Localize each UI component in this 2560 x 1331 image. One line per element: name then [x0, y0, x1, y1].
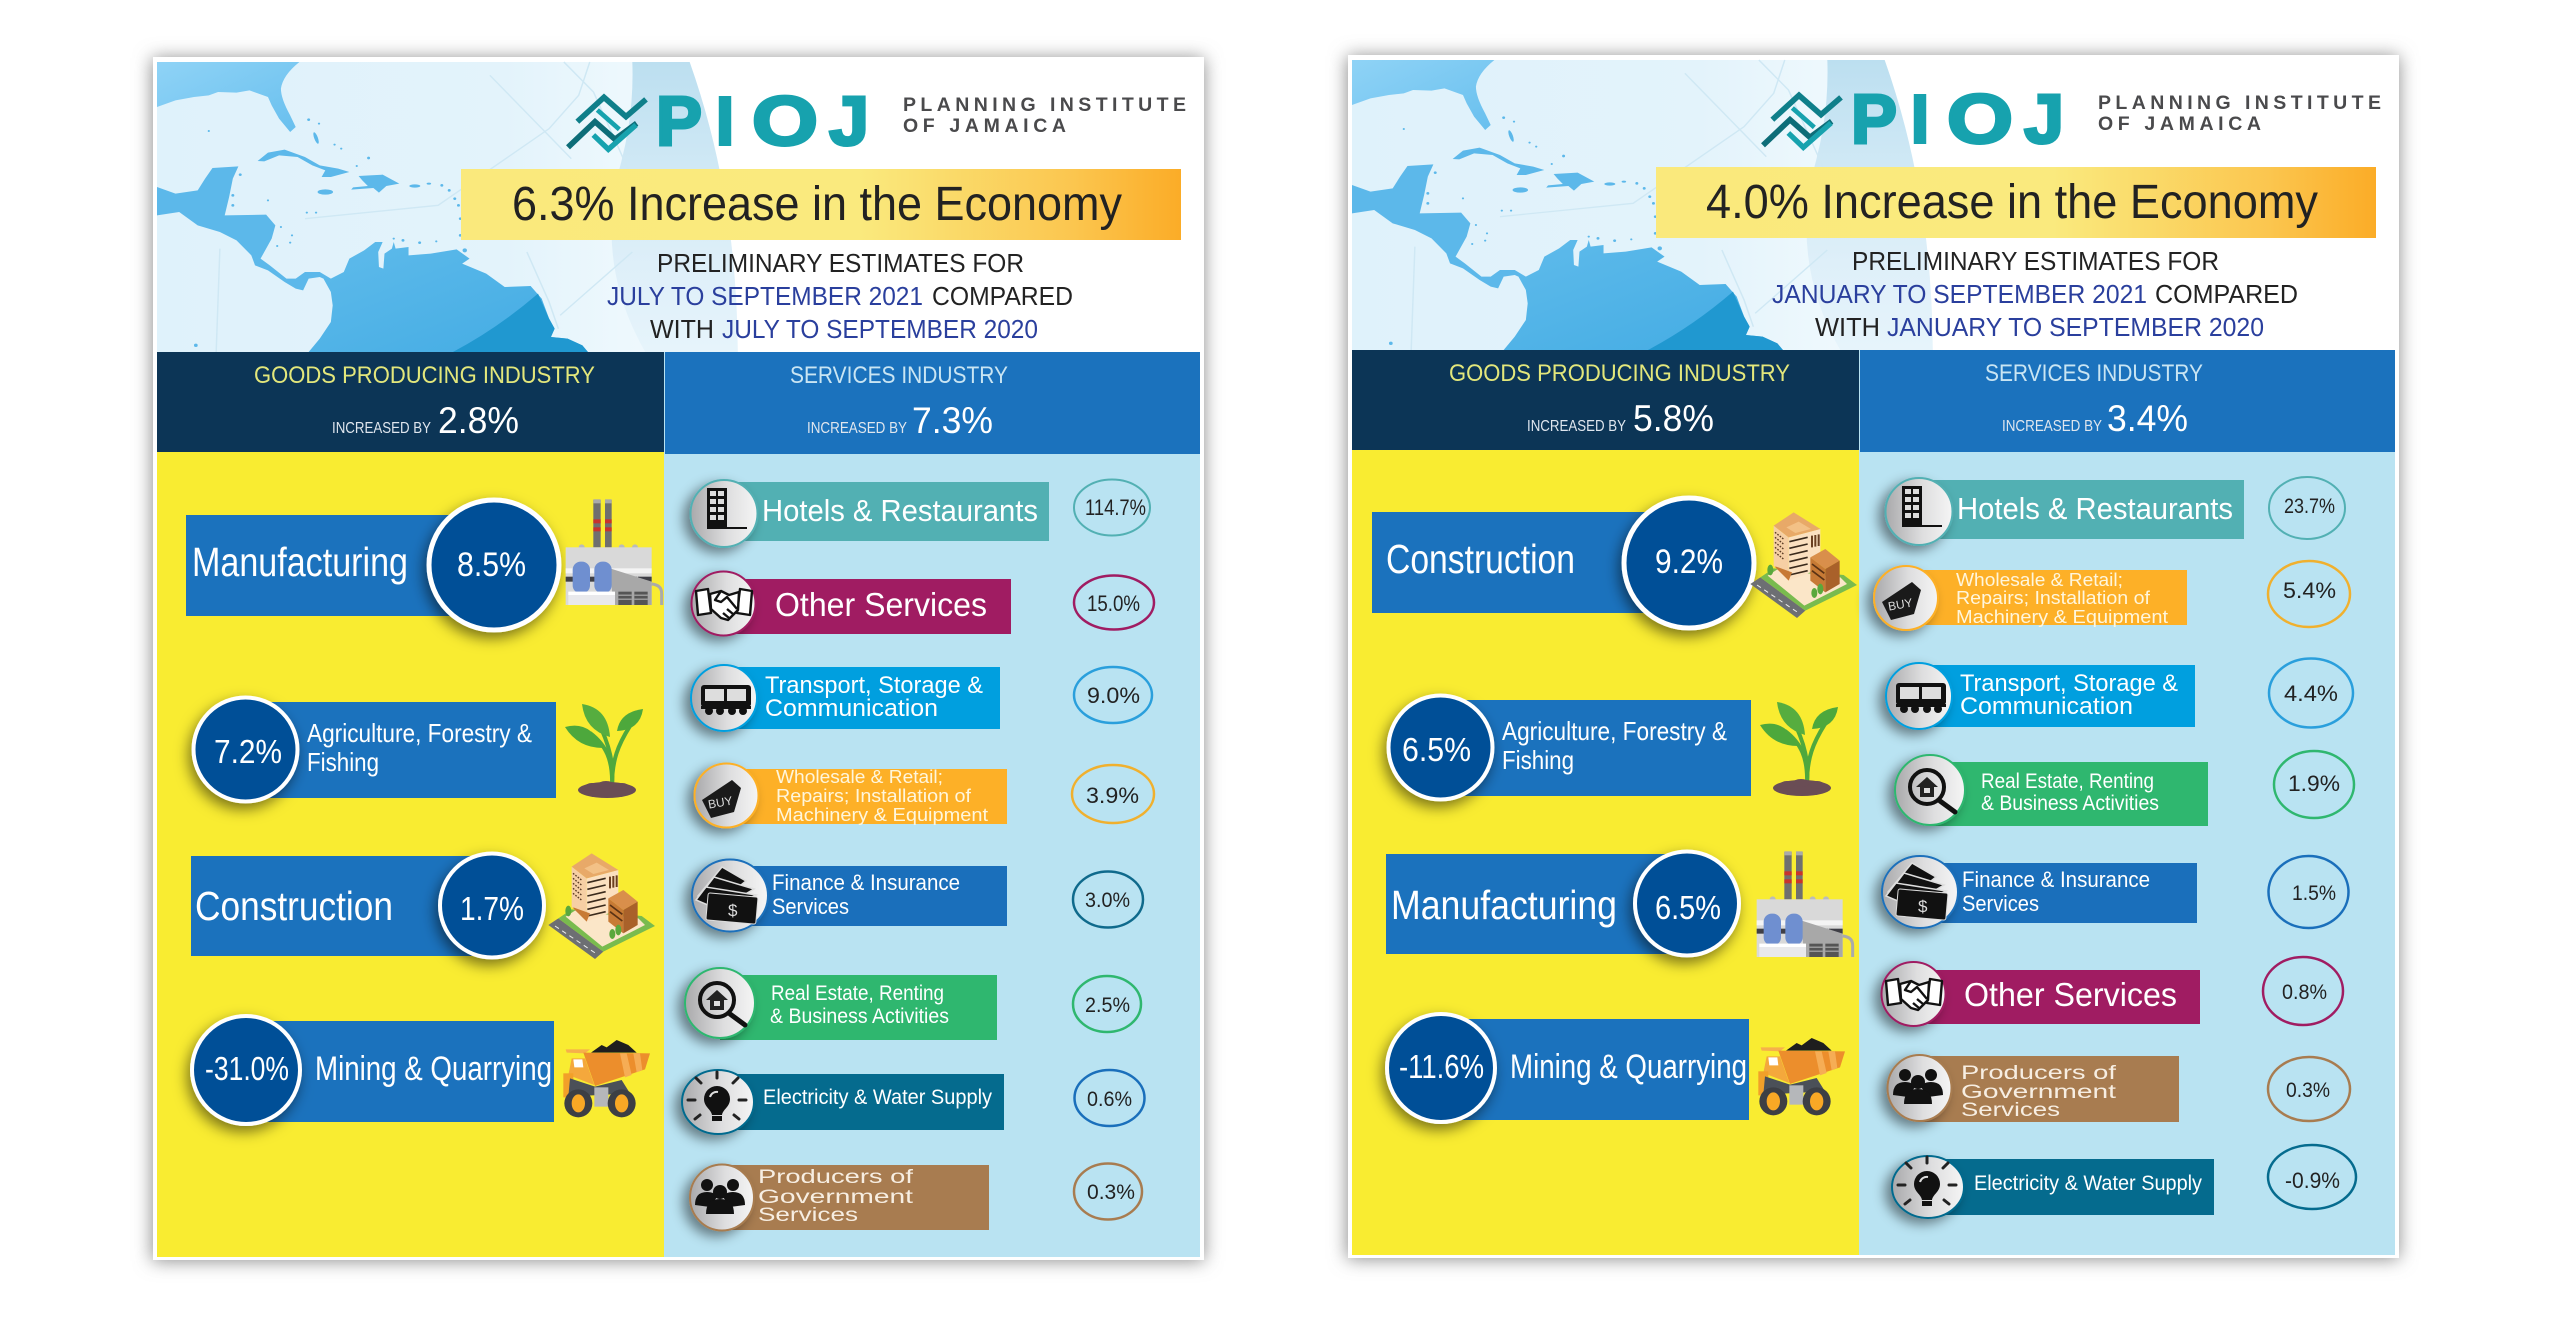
- column: goods producing industry: [157, 352, 665, 1257]
- value: producers: 0.3%: [2286, 1079, 2330, 1102]
- row: Wholesale & Retail: Machinery & Equipment: [776, 805, 988, 825]
- header: services: 3.4%: [2107, 398, 2188, 439]
- icon: buy tag: [702, 780, 741, 818]
- value: hotels: [2269, 477, 2345, 539]
- row: Transport: Communication: [765, 695, 938, 722]
- logo: PIOJ Planning Institute of Jamaica: [1763, 80, 2381, 158]
- header: services: [1860, 350, 2395, 452]
- icon: dollar note: $: [728, 901, 738, 920]
- row: Manufacturing: [186, 500, 559, 630]
- row: Agriculture: Fishing: [1502, 745, 1574, 775]
- header: goods producing: GOODS PRODUCING INDUSTRY: [1449, 360, 1790, 387]
- row: Mining & Quarrying: -11.6%: [1399, 1048, 1484, 1085]
- panel: January to September 2021: [1347, 55, 2399, 1259]
- row: Producers of Government: Government: [758, 1187, 914, 1208]
- row: Mining & Quarrying: -31.0%: [205, 1050, 289, 1087]
- value: hotels: 114.7%: [1085, 495, 1146, 520]
- row: Other Services: [692, 572, 1011, 636]
- row: Electricity: [682, 1070, 1004, 1134]
- row: Electricity: [1892, 1156, 2214, 1218]
- value: wholesale: 3.9%: [1086, 783, 1139, 808]
- value: wholesale: 5.4%: [2283, 578, 2336, 603]
- icon: truck: [563, 1040, 650, 1117]
- subtitle: PRELIMINARY ESTIMATES FOR: [657, 248, 1024, 278]
- row: Manufacturing: [1386, 852, 1739, 956]
- icon: factory: [566, 499, 662, 605]
- row: Hotels & Restaurants: [1886, 478, 2244, 545]
- row: Agriculture: Agriculture, Forestry &: [1502, 716, 1727, 746]
- header: goods producing: [157, 352, 665, 452]
- value: transport: [1074, 667, 1152, 723]
- icon: plant: [565, 704, 643, 798]
- value: producers: 0.3%: [1087, 1181, 1135, 1204]
- row: Producers of Government: [690, 1164, 989, 1230]
- row: Manufacturing: 8.5%: [457, 546, 526, 584]
- row: Hotels & Restaurants: Hotels & Restaurants: [1957, 491, 2233, 526]
- row: Real Estate: & Business Activities: [770, 1005, 949, 1028]
- row: Other Services: [1882, 962, 2200, 1026]
- icon: plant: [1760, 702, 1838, 796]
- value: wholesale: [2268, 561, 2350, 627]
- row: Hotels & Restaurants: [690, 480, 1049, 547]
- value: electricity: -0.9%: [2285, 1168, 2340, 1193]
- subtitle: COMPARED: [2155, 279, 2298, 309]
- column: services industry: [664, 352, 1200, 1257]
- row: Construction: 9.2%: [1655, 543, 1723, 581]
- value: other services: 15.0%: [1087, 591, 1140, 616]
- subtitle: [607, 248, 1073, 344]
- icon: buy tag: BUY: [1887, 596, 1914, 614]
- row: Wholesale & Retail: Wholesale & Retail;: [1956, 570, 2123, 590]
- row: Real Estate: & Business Activities: [1981, 792, 2159, 815]
- row: Agriculture: [194, 698, 556, 802]
- row: Producers of Government: [1888, 1055, 2179, 1122]
- value: electricity: [2268, 1145, 2356, 1209]
- row: Wholesale & Retail: Repairs; Installation of: [776, 786, 972, 806]
- title banner: 6.3% Increase in the Economy: [512, 178, 1122, 231]
- row: Wholesale & Retail: Repairs; Installation of: [1956, 588, 2151, 608]
- row: Agriculture: Fishing: [307, 747, 379, 777]
- row: Transport: [691, 665, 1000, 731]
- value: electricity: 0.6%: [1087, 1088, 1132, 1111]
- header: services: SERVICES INDUSTRY: [790, 362, 1008, 389]
- icon: dollar note: $: [1918, 897, 1928, 916]
- row: Wholesale & Retail: Wholesale & Retail;: [776, 767, 943, 787]
- row: Manufacturing: Manufacturing: [1391, 882, 1617, 928]
- title banner: [461, 169, 1181, 240]
- icon: buy tag: BUY: [707, 794, 734, 812]
- row: Construction: Construction: [1386, 536, 1575, 582]
- icon: truck: [1758, 1038, 1845, 1115]
- value: hotels: [1074, 480, 1150, 536]
- row: Transport: [1886, 663, 2195, 729]
- subtitle: PRELIMINARY ESTIMATES FOR: [1852, 246, 2219, 276]
- row: Construction: [191, 854, 544, 958]
- row: Hotels & Restaurants: Hotels & Restaurants: [762, 493, 1038, 528]
- column: services industry: [1859, 350, 2395, 1255]
- row: Transport: Transport, Storage &: [765, 672, 983, 699]
- row: Wholesale & Retail: [1874, 566, 2187, 630]
- subtitle: JULY TO SEPTEMBER 2021: [607, 281, 923, 311]
- row: Wholesale & Retail: Machinery & Equipment: [1956, 607, 2168, 627]
- row: Agriculture: 7.2%: [214, 733, 282, 770]
- column: goods producing industry: [1352, 350, 1860, 1255]
- value: producers: [1074, 1164, 1142, 1220]
- title banner: 4.0% Increase in the Economy: [1706, 176, 2318, 229]
- value: finance: 3.0%: [1085, 889, 1130, 912]
- row: Producers of Government: Government: [1961, 1082, 2117, 1103]
- row: Real Estate: Real Estate, Renting: [1981, 770, 2154, 793]
- subtitle: COMPARED: [932, 281, 1073, 311]
- subtitle: JANUARY TO SEPTEMBER 2021: [1772, 279, 2147, 309]
- row: Construction: 1.7%: [460, 890, 524, 927]
- header: goods producing: INCREASED BY: [332, 420, 431, 437]
- row: Wholesale & Retail: [694, 764, 1007, 828]
- header: goods producing: GOODS PRODUCING INDUSTRY: [254, 362, 595, 389]
- world map background: [157, 62, 738, 352]
- title banner: [1656, 167, 2376, 238]
- subtitle: [1772, 246, 2298, 342]
- row: Transport: Communication: [1960, 693, 2133, 720]
- value: other services: 0.8%: [2282, 981, 2327, 1004]
- header: services: [665, 352, 1200, 454]
- row: Producers of Government: Producers of: [758, 1167, 914, 1188]
- value: real estate: 1.9%: [2288, 771, 2340, 796]
- row: Construction: Construction: [195, 883, 393, 929]
- row: Real Estate: [1895, 755, 2208, 826]
- value: finance: 1.5%: [2292, 882, 2336, 905]
- value: electricity: [1074, 1070, 1144, 1126]
- header: goods producing: 5.8%: [1633, 398, 1714, 439]
- row: Finance & Insurance: Finance & Insurance: [772, 870, 960, 895]
- subtitle: JANUARY TO SEPTEMBER 2020: [1887, 312, 2264, 342]
- row: Producers of Government: Producers of: [1961, 1063, 2117, 1084]
- row: Agriculture: 6.5%: [1402, 731, 1471, 768]
- row: Agriculture: Agriculture, Forestry &: [307, 718, 532, 748]
- header: goods producing: 2.8%: [438, 400, 519, 441]
- value: producers: [2268, 1057, 2350, 1121]
- row: Finance & Insurance: Services: [772, 894, 849, 919]
- value: finance: [1073, 872, 1143, 928]
- row: Finance & Insurance: [1882, 856, 2197, 928]
- row: Manufacturing: Manufacturing: [192, 539, 408, 585]
- panel: July to September 2021: [152, 57, 1204, 1261]
- row: Producers of Government: Services: [758, 1205, 858, 1226]
- row: Other Services: Other Services: [1964, 976, 2177, 1013]
- icon: dollar note: [1896, 889, 1948, 920]
- subtitle: WITH: [650, 314, 714, 344]
- subtitle: JULY TO SEPTEMBER 2020: [722, 314, 1038, 344]
- row: Real Estate: [685, 968, 997, 1040]
- header: services: INCREASED BY: [807, 420, 907, 437]
- row: Electricity: Electricity & Water Supply: [1974, 1172, 2202, 1195]
- header: services: SERVICES INDUSTRY: [1985, 360, 2203, 387]
- row: Agriculture: [1388, 696, 1751, 800]
- value: transport: 9.0%: [1087, 683, 1140, 708]
- row: Transport: Transport, Storage &: [1960, 670, 2178, 697]
- value: real estate: [1073, 976, 1141, 1032]
- row: Producers of Government: Services: [1961, 1100, 2060, 1121]
- value: wholesale: [1072, 765, 1154, 823]
- icon: factory: [1757, 851, 1853, 957]
- header: services: INCREASED BY: [2002, 418, 2102, 435]
- row: Electricity: Electricity & Water Supply: [763, 1086, 992, 1109]
- value: other services: [1074, 576, 1154, 630]
- value: hotels: 23.7%: [2284, 495, 2335, 518]
- row: Mining & Quarrying: Mining & Quarrying: [1510, 1048, 1747, 1086]
- row: Mining & Quarrying: [1387, 1014, 1749, 1122]
- icon: building: [1750, 512, 1857, 618]
- value: other services: [2263, 957, 2343, 1025]
- header: goods producing: INCREASED BY: [1527, 418, 1626, 435]
- icon: buy tag: [1882, 582, 1921, 620]
- world map background: [1352, 60, 1933, 350]
- row: Mining & Quarrying: Mining & Quarrying: [315, 1050, 552, 1088]
- header: services: 7.3%: [912, 400, 993, 441]
- row: Manufacturing: 6.5%: [1655, 889, 1721, 926]
- subtitle: WITH: [1815, 312, 1880, 342]
- row: Real Estate: Real Estate, Renting: [771, 982, 944, 1005]
- icon: building: [548, 853, 655, 959]
- row: Other Services: Other Services: [775, 586, 987, 623]
- row: Finance & Insurance: [692, 860, 1007, 932]
- row: Mining & Quarrying: [192, 1016, 554, 1124]
- value: real estate: [2274, 751, 2354, 818]
- row: Finance & Insurance: Finance & Insurance: [1962, 867, 2150, 892]
- row: Construction: [1372, 498, 1754, 628]
- row: Finance & Insurance: Services: [1962, 891, 2039, 916]
- icon: dollar note: [706, 893, 758, 924]
- value: finance: [2268, 856, 2348, 928]
- value: real estate: 2.5%: [1085, 994, 1130, 1017]
- value: transport: 4.4%: [2284, 681, 2338, 706]
- header: goods producing: [1352, 350, 1860, 450]
- logo: PIOJ Planning Institute of Jamaica: [568, 82, 1186, 160]
- value: transport: [2269, 658, 2353, 728]
